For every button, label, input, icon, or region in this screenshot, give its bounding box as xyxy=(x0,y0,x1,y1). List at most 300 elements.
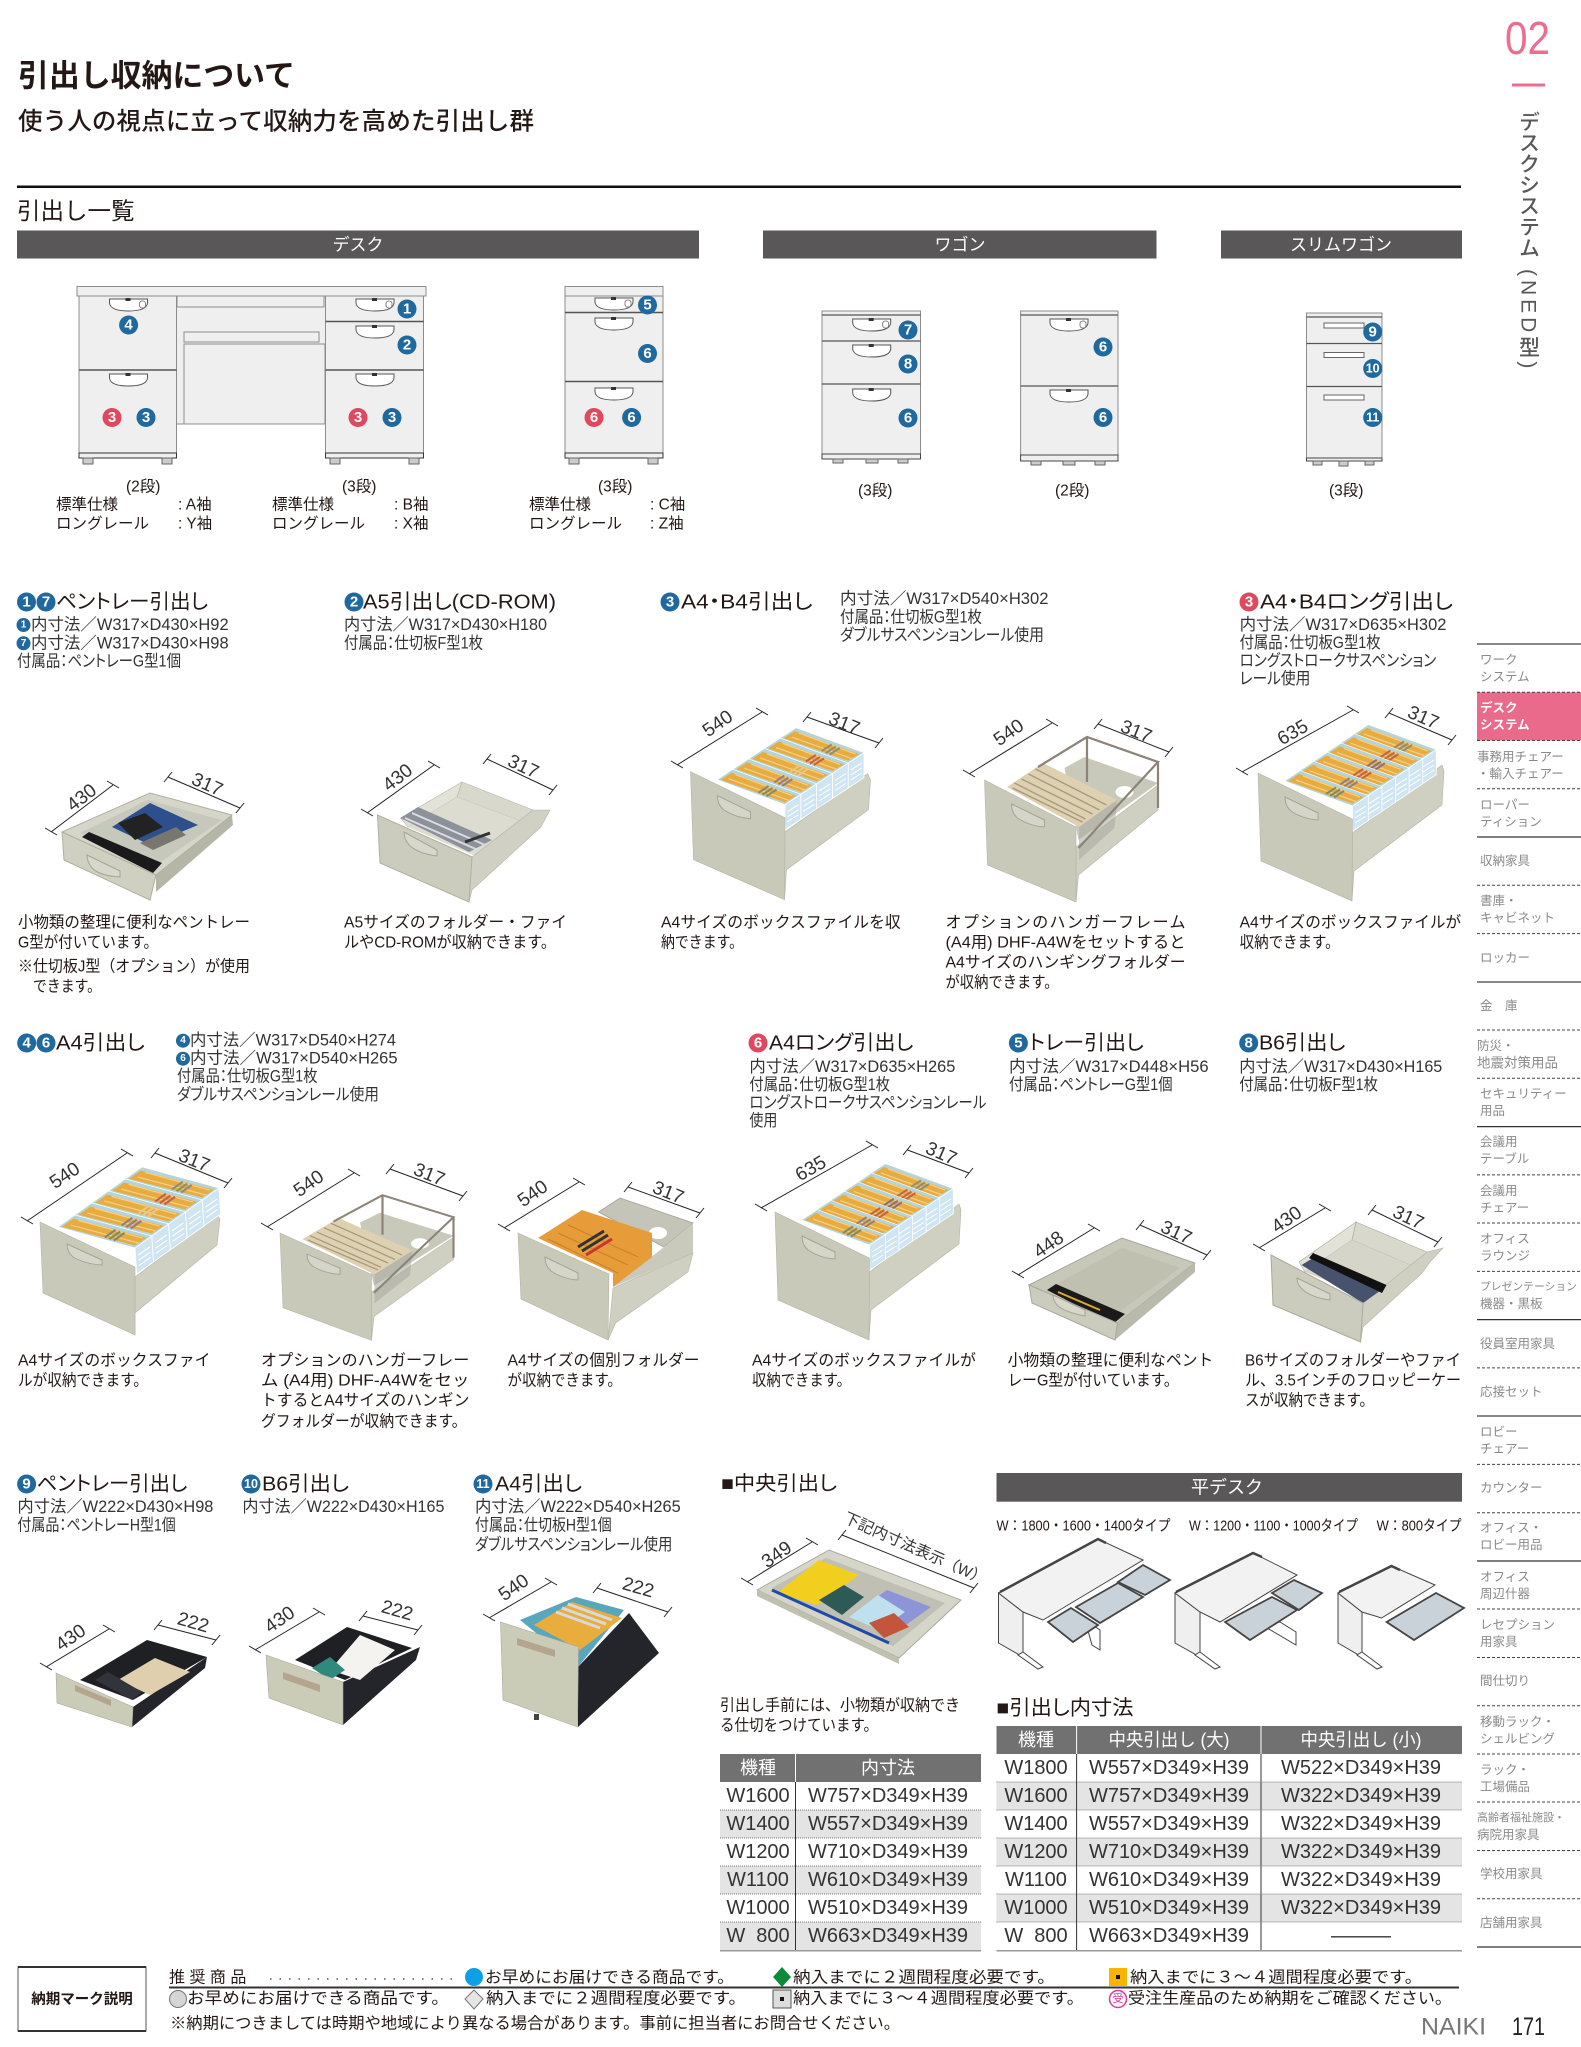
panel: B6 drawer 8 xyxy=(1239,1032,1461,1410)
badge 6 upper xyxy=(1094,338,1112,356)
diagram: flat desk wide xyxy=(998,1539,1170,1669)
table: center drawer inner sizes: W663×D349×H39 xyxy=(808,1925,968,1947)
table: drawer inner sizes: W557×D349×H39 xyxy=(1089,1757,1249,1779)
desk spec labels: (3段) xyxy=(598,478,632,496)
flat desk type labels: W：1800・1600・1400タイプ xyxy=(996,1518,1170,1534)
badge 6 red: 6 xyxy=(590,409,598,426)
diagram: flat desk medium xyxy=(1175,1553,1322,1669)
table: drawer inner sizes: W 800 xyxy=(1004,1925,1068,1947)
side navigation xyxy=(1477,644,1581,1947)
badge 10 xyxy=(1363,359,1382,378)
badge 3 red: 3 xyxy=(108,409,116,426)
dimensions: 222 xyxy=(620,1574,656,1602)
dimensions: 317 xyxy=(922,1138,960,1170)
badge 6 upper: 6 xyxy=(1099,338,1107,356)
description: (A4用) DHF-A4Wをセットすると xyxy=(946,934,1186,952)
dimensions: 317 xyxy=(1157,1217,1195,1249)
badge 8: 8 xyxy=(904,356,912,372)
table: center drawer inner sizes: 内寸法 xyxy=(861,1758,915,1778)
specs xyxy=(17,1497,213,1535)
specs: 内寸法／W317×D430×H165 xyxy=(1239,1057,1442,1076)
specs: 6 xyxy=(180,1053,186,1064)
badge 1: 1 xyxy=(403,300,411,318)
badge 6 red xyxy=(584,408,604,427)
specs: 7 xyxy=(21,638,27,649)
table: center drawer inner sizes: W1600 xyxy=(726,1785,790,1807)
description: ※仕切板J型（オプション）が使用 xyxy=(18,958,250,976)
side navigation: レセプション xyxy=(1480,1618,1555,1632)
description: 小物類の整理に便利なペントレー xyxy=(18,914,250,932)
specs: 付属品：ペントレーG型1個 xyxy=(1009,1075,1173,1094)
description: オプションのハンガーフレーム xyxy=(946,914,1186,932)
description: B6サイズのフォルダーやファイ xyxy=(1245,1352,1461,1370)
specs xyxy=(840,589,1048,644)
description xyxy=(946,914,1186,992)
category bar: flat desk: 平デスク xyxy=(1191,1478,1263,1498)
side navigation: ・輸入チェアー xyxy=(1477,767,1564,781)
description: 引出し手前には、小物類が収納でき xyxy=(720,1696,960,1714)
dimensions: 222 xyxy=(379,1597,415,1625)
dimensions xyxy=(1236,702,1456,775)
heading: ■中央引出し xyxy=(721,1472,837,1495)
table: drawer inner sizes: W322×D349×H39 xyxy=(1281,1813,1441,1835)
dimensions xyxy=(963,715,1173,777)
legend: delivery marks xyxy=(18,1967,1459,2032)
heading xyxy=(17,1032,145,1054)
dimensions: 下記内寸法表示（W） xyxy=(841,1509,989,1588)
table: drawer inner sizes: W322×D349×H39 xyxy=(1281,1897,1441,1919)
panel: A4 B4 drawer xyxy=(660,589,1186,992)
photo: hanger frame drawer xyxy=(984,737,1158,902)
specs xyxy=(749,1057,986,1130)
side navigation: 工場備品 xyxy=(1480,1780,1530,1794)
dimensions: 540 xyxy=(46,1158,84,1194)
dimensions: 317 xyxy=(825,708,863,740)
dimensions: 430 xyxy=(379,760,417,796)
dimensions: 430 xyxy=(261,1602,299,1638)
dimensions xyxy=(1012,1217,1211,1278)
table: drawer inner sizes: ——— xyxy=(1331,1925,1391,1947)
description: A4サイズのボックスファイルを収 xyxy=(661,914,901,932)
table: drawer inner sizes xyxy=(996,1726,1462,1952)
dimensions: 317 xyxy=(1117,716,1155,748)
description xyxy=(1008,1352,1213,1390)
desk spec labels: (3段) xyxy=(342,478,376,496)
photo: box files drawer xyxy=(690,728,870,900)
description: レーG型が付いています。 xyxy=(1008,1372,1179,1390)
heading: 6 xyxy=(42,1034,50,1052)
heading: A4・B4引出し xyxy=(681,590,813,614)
photo: B6 drawer xyxy=(1271,1222,1443,1342)
badge 9: 9 xyxy=(1369,324,1377,340)
desk spec labels: : C袖 xyxy=(650,496,685,514)
specs: 内寸法／W317×D540×H265 xyxy=(190,1049,398,1068)
legend row 1: 推 奨 商 品 xyxy=(169,1968,246,1986)
heading: 5 xyxy=(1014,1034,1023,1052)
heading: 1 xyxy=(22,594,31,610)
flat desk type labels: W：800タイプ xyxy=(1377,1518,1462,1534)
dimensions xyxy=(361,751,557,816)
dimensions xyxy=(498,1176,704,1231)
specs xyxy=(16,615,229,671)
description: が収納できます。 xyxy=(946,974,1058,992)
photo: hanger frame drawer xyxy=(280,1195,454,1340)
badge 5: 5 xyxy=(643,296,652,314)
table: drawer inner sizes: 中央引出し (大) xyxy=(1108,1730,1230,1750)
specs xyxy=(1239,1057,1442,1094)
heading: A4引出し xyxy=(56,1032,145,1054)
flat desk type labels xyxy=(996,1518,1462,1534)
wagon tier labels: (3段) xyxy=(858,482,892,500)
description: る仕切をつけています。 xyxy=(720,1716,878,1734)
badge 2 xyxy=(398,336,416,354)
side navigation: ロビー xyxy=(1480,1425,1518,1439)
desk spec labels: : A袖 xyxy=(178,496,212,514)
side navigation: 病院用家具 xyxy=(1477,1828,1540,1842)
legend row 2 xyxy=(170,1990,1452,2009)
badge 2: 2 xyxy=(403,336,411,354)
panel: pen tray drawer 9 xyxy=(17,1472,220,1727)
badge 3 red xyxy=(102,408,122,427)
table: drawer inner sizes: W322×D349×H39 xyxy=(1281,1869,1441,1891)
side navigation: 役員室用家具 xyxy=(1480,1336,1555,1351)
side navigation: シェルビング xyxy=(1480,1732,1555,1746)
side navigation: デスク xyxy=(1480,700,1518,715)
dimensions: 430 xyxy=(52,1620,90,1656)
side navigation: ロビー用品 xyxy=(1480,1538,1543,1552)
legend title box: 納期マーク説明 xyxy=(31,1990,133,2008)
badge 6 lower: 6 xyxy=(1099,409,1107,426)
category bar: desk: デスク xyxy=(332,234,384,254)
side navigation: 用家具 xyxy=(1480,1635,1518,1649)
description: トするとA4サイズのハンギン xyxy=(261,1392,469,1410)
diagram: wagon 3 tier xyxy=(822,311,920,463)
specs: 付属品：仕切板H型1個 xyxy=(475,1516,612,1535)
specs xyxy=(1009,1057,1209,1094)
specs: 内寸法／W222×D430×H98 xyxy=(17,1497,213,1516)
panel: pen tray drawer 1/7 xyxy=(16,590,250,996)
specs: 使用 xyxy=(749,1111,777,1130)
side navigation: 応接セット xyxy=(1480,1384,1543,1399)
table: center drawer inner sizes: W710×D349×H39 xyxy=(808,1841,968,1863)
heading: トレー引出し xyxy=(1029,1032,1144,1054)
badge 3 blue xyxy=(136,408,156,427)
photo: individual folder drawer xyxy=(518,1198,693,1340)
heading: A5引出し(CD-ROM) xyxy=(363,590,556,614)
dimensions: 222 xyxy=(175,1609,211,1637)
right rail: chapter title xyxy=(1516,111,1540,372)
dimensions xyxy=(261,1159,467,1230)
dimensions xyxy=(45,769,244,835)
table: center drawer inner sizes xyxy=(720,1754,981,1952)
specs: 内寸法／W222×D430×H165 xyxy=(242,1497,444,1516)
heading: drawer inner sizes: ■引出し内寸法 xyxy=(996,1696,1134,1720)
subtitle: 使う人の視点に立って収納力を高めた引出し群 xyxy=(18,108,534,136)
side navigation: 事務用チェアー xyxy=(1477,750,1564,764)
specs: ダブルサスペンションレール使用 xyxy=(177,1084,379,1104)
table: center drawer inner sizes: W757×D349×H39 xyxy=(808,1785,968,1807)
badge 10: 10 xyxy=(1366,362,1380,376)
wagon tier labels: (2段) xyxy=(1055,482,1089,500)
flat desk type labels: W：1200・1100・1000タイプ xyxy=(1189,1518,1358,1534)
desk spec labels: : X袖 xyxy=(394,514,428,532)
side navigation: オフィス xyxy=(1480,1570,1530,1584)
badge 8 xyxy=(898,354,918,374)
specs: 内寸法／W317×D430×H98 xyxy=(31,633,229,652)
badge 3 red right: 3 xyxy=(354,409,362,426)
table: drawer inner sizes: W1600 xyxy=(1004,1785,1068,1807)
section heading: drawer list: 引出し一覧 xyxy=(17,198,134,224)
table: drawer inner sizes: W1400 xyxy=(1004,1813,1068,1835)
description: A4サイズのボックスファイ xyxy=(18,1352,210,1370)
side navigation: 会議用 xyxy=(1480,1184,1518,1198)
badge 6 lower xyxy=(1094,408,1112,427)
side navigation: チェアー xyxy=(1480,1442,1529,1456)
specs: ロングストロークサスペンションレール xyxy=(749,1093,986,1112)
dimensions: 540 xyxy=(290,1166,328,1202)
side navigation: ティション xyxy=(1480,815,1542,829)
table: drawer inner sizes: 機種 xyxy=(1018,1730,1054,1750)
side navigation: 移動ラック・ xyxy=(1480,1715,1555,1729)
table: center drawer inner sizes: W557×D349×H39 xyxy=(808,1813,968,1835)
legend title box xyxy=(18,1967,146,2031)
diagram: wagon 2 tier xyxy=(1021,311,1118,465)
specs: 内寸法／W317×D635×H302 xyxy=(1240,615,1446,634)
badge 6: 6 xyxy=(643,345,652,362)
side navigation: 用品 xyxy=(1480,1104,1505,1118)
dimensions: 540 xyxy=(699,706,737,742)
desk spec labels: 標準仕様 xyxy=(529,496,592,514)
heading: 7 xyxy=(42,594,50,610)
dimensions xyxy=(741,1509,989,1593)
photo: center drawer with stationery xyxy=(757,1550,961,1664)
badge 3 blue right xyxy=(382,408,402,427)
legend row 2: 受注生産品のため納期をご確認ください。 xyxy=(1128,1990,1452,2008)
side navigation: オフィス xyxy=(1480,1232,1530,1246)
dimensions: 317 xyxy=(188,769,226,801)
dimensions xyxy=(249,1597,422,1653)
side navigation: 周辺什器 xyxy=(1480,1587,1531,1601)
heading: 2 xyxy=(350,594,358,610)
table: drawer inner sizes: W1000 xyxy=(1004,1897,1068,1919)
specs: ロングストロークサスペンション xyxy=(1240,651,1437,670)
dimensions: 540 xyxy=(495,1570,533,1606)
category bar: slim wagon: スリムワゴン xyxy=(1290,234,1392,254)
heading: A4引出し xyxy=(495,1472,582,1496)
dimensions xyxy=(21,1145,232,1224)
specs xyxy=(176,1031,398,1104)
side navigation: テーブル xyxy=(1480,1151,1529,1166)
heading: B6引出し xyxy=(262,1472,349,1496)
table: drawer inner sizes: W322×D349×H39 xyxy=(1281,1785,1441,1807)
side navigation: プレゼンテーション xyxy=(1480,1280,1577,1293)
photo: long box files drawer xyxy=(1258,725,1444,901)
side navigation: ラック・ xyxy=(1480,1763,1530,1777)
description: 小物類の整理に便利なペント xyxy=(1008,1352,1213,1370)
desk spec labels: : B袖 xyxy=(394,496,428,514)
heading: ペントレー引出し xyxy=(56,590,208,614)
legend row 2: 受 xyxy=(1112,1992,1124,2005)
description xyxy=(344,914,567,952)
specs: 付属品：仕切板F型1枚 xyxy=(1239,1075,1378,1094)
table: drawer inner sizes: W1100 xyxy=(1005,1869,1067,1891)
side navigation: ロッカー xyxy=(1480,951,1530,965)
specs: 内寸法／W317×D448×H56 xyxy=(1009,1057,1209,1076)
side navigation: システム xyxy=(1480,670,1530,684)
table: drawer inner sizes: W610×D349×H39 xyxy=(1089,1869,1249,1891)
table: drawer inner sizes: 中央引出し (小) xyxy=(1300,1730,1422,1750)
table: center drawer inner sizes: W1100 xyxy=(727,1869,789,1891)
specs: 付属品：仕切板G型1枚 xyxy=(1240,633,1381,652)
legend note: ※納期につきましては時期や地域により異なる場合があります。事前に担当者にお問合せください。 xyxy=(170,2014,900,2032)
dimensions: 317 xyxy=(1404,702,1442,734)
heading: 6 xyxy=(754,1034,762,1052)
heading: A4・B4ロング引出し xyxy=(1260,590,1453,614)
badge 11: 11 xyxy=(1366,410,1379,424)
legend row 2: お早めにお届けできる商品です。 xyxy=(187,1990,449,2008)
specs: 内寸法／W317×D430×H180 xyxy=(344,615,547,634)
description: ルやCD-ROMが収納できます。 xyxy=(344,934,556,952)
badge 6 blue: 6 xyxy=(627,409,636,426)
dimensions: 540 xyxy=(990,715,1028,751)
specs: 内寸法／W317×D635×H265 xyxy=(749,1057,955,1076)
legend row 1: 納入までに３～４週間程度必要です。 xyxy=(1130,1968,1422,1986)
panel: A4 B4 long drawer xyxy=(1236,590,1461,952)
legend row 2: 納入までに２週間程度必要です。 xyxy=(486,1990,746,2008)
side navigation: 地震対策用品 xyxy=(1477,1054,1558,1070)
panel: tray drawer 5 xyxy=(1008,1032,1213,1390)
dimensions xyxy=(483,1570,672,1621)
side navigation: 書庫・ xyxy=(1480,894,1518,908)
table: drawer inner sizes: W322×D349×H39 xyxy=(1281,1841,1441,1863)
desk spec labels: : Y袖 xyxy=(178,514,212,532)
table: center drawer inner sizes: W1400 xyxy=(726,1813,790,1835)
title: 引出し収納について xyxy=(18,58,295,94)
dimensions xyxy=(671,706,883,768)
side navigation: 高齢者福祉施設・ xyxy=(1477,1810,1565,1824)
specs: 付属品：ペントレーH型1個 xyxy=(17,1516,176,1535)
table: center drawer inner sizes: W 800 xyxy=(726,1925,790,1947)
side navigation: ワーク xyxy=(1480,653,1518,667)
legend row 2: 納入までに３～４週間程度必要です。 xyxy=(793,1990,1084,2008)
description: 収納できます。 xyxy=(1240,934,1340,952)
specs xyxy=(1240,615,1446,688)
table: center drawer inner sizes: W1000 xyxy=(726,1897,790,1919)
description xyxy=(18,914,250,996)
photo: pen tray drawer xyxy=(62,793,233,900)
description: ル、3.5インチのフロッピーケー xyxy=(1245,1372,1461,1390)
side navigation: 学校用家具 xyxy=(1480,1866,1543,1881)
specs: レール使用 xyxy=(1240,669,1310,688)
description: G型が付いています。 xyxy=(18,934,158,952)
description xyxy=(661,914,901,952)
specs xyxy=(475,1497,681,1554)
badge 6: 6 xyxy=(904,410,912,426)
legend row 1: お早めにお届けできる商品です。 xyxy=(485,1968,734,1986)
desk spec labels: ロングレール xyxy=(529,514,622,532)
panel: A4 long drawer 6 xyxy=(748,1032,986,1390)
specs: 付属品：ペントレーG型1個 xyxy=(17,652,181,671)
heading: 3 xyxy=(666,594,674,610)
description xyxy=(508,1352,700,1390)
table: drawer inner sizes: W1800 xyxy=(1004,1757,1068,1779)
panel: center drawer xyxy=(720,1472,989,1734)
side navigation: 会議用 xyxy=(1480,1135,1518,1149)
dimensions: 448 xyxy=(1030,1227,1068,1263)
desk spec labels: ロングレール xyxy=(56,514,149,532)
dimensions: 349 xyxy=(758,1537,796,1573)
badge 6 blue xyxy=(622,408,641,427)
diagram: flat desk small xyxy=(1338,1566,1464,1669)
badge 9 xyxy=(1363,322,1382,342)
dimensions: 317 xyxy=(175,1145,213,1177)
panel: A4 drawer 11 xyxy=(474,1472,681,1727)
table: drawer inner sizes: W510×D349×H39 xyxy=(1089,1897,1249,1919)
side navigation: 店舗用家具 xyxy=(1480,1916,1543,1930)
table: center drawer inner sizes: W510×D349×H39 xyxy=(808,1897,968,1919)
page number: 171 xyxy=(1512,2013,1545,2041)
description xyxy=(1245,1352,1461,1410)
side navigation: 間仕切り xyxy=(1480,1674,1530,1688)
photo: tray drawer xyxy=(1029,1238,1195,1340)
side navigation: ラウンジ xyxy=(1480,1249,1530,1263)
dimensions: 317 xyxy=(1389,1202,1427,1234)
heading: 4 xyxy=(23,1034,32,1052)
heading: 3 xyxy=(1245,594,1253,610)
category bar: wagon: ワゴン xyxy=(934,234,986,254)
table: center drawer inner sizes: 機種 xyxy=(740,1758,776,1778)
badge 3 blue: 3 xyxy=(142,409,150,426)
badge 11 xyxy=(1363,408,1382,427)
specs: ダブルサスペンションレール使用 xyxy=(475,1534,672,1554)
table: center drawer inner sizes: W1200 xyxy=(726,1841,790,1863)
dimensions: 430 xyxy=(1268,1202,1306,1238)
desk spec labels xyxy=(56,478,685,532)
dimensions xyxy=(1253,1202,1442,1251)
description xyxy=(261,1352,469,1430)
dimensions: 635 xyxy=(792,1152,830,1186)
right rail: chapter number: 02 xyxy=(1505,12,1550,64)
table: drawer inner sizes: W710×D349×H39 xyxy=(1089,1841,1249,1863)
badge 3 blue right: 3 xyxy=(388,409,396,426)
heading: 8 xyxy=(1245,1034,1253,1052)
legend row 1: 納入までに２週間程度必要です。 xyxy=(793,1968,1055,1986)
category bar: wagon xyxy=(763,230,1156,258)
description: ルが収納できます。 xyxy=(18,1372,148,1390)
specs: 内寸法／W317×D540×H274 xyxy=(190,1031,396,1050)
badge 7 xyxy=(898,320,918,340)
side navigation: 収納家具 xyxy=(1480,853,1530,868)
badge 1 xyxy=(398,300,416,318)
description: A4サイズのハンギングフォルダー xyxy=(946,954,1186,972)
desk spec labels: 標準仕様 xyxy=(56,496,119,514)
heading: A4ロング引出し xyxy=(769,1032,913,1054)
specs: 付属品：仕切板F型1枚 xyxy=(344,633,483,652)
table: drawer inner sizes: W557×D349×H39 xyxy=(1089,1813,1249,1835)
panel: B6 drawer 10 xyxy=(242,1472,444,1725)
heading: 11 xyxy=(476,1477,490,1491)
category bar: slim wagon xyxy=(1221,230,1462,258)
description: スが収納できます。 xyxy=(1245,1392,1374,1410)
heading: 10 xyxy=(244,1477,258,1491)
diagram: double pedestal desk xyxy=(77,286,426,464)
side navigation: チェアー xyxy=(1480,1201,1529,1215)
dimensions: 635 xyxy=(1274,716,1312,750)
category bar: flat desk xyxy=(996,1473,1462,1502)
side navigation: 金 庫 xyxy=(1480,999,1518,1013)
badge 6 xyxy=(898,408,918,428)
badge 6 xyxy=(638,344,657,363)
